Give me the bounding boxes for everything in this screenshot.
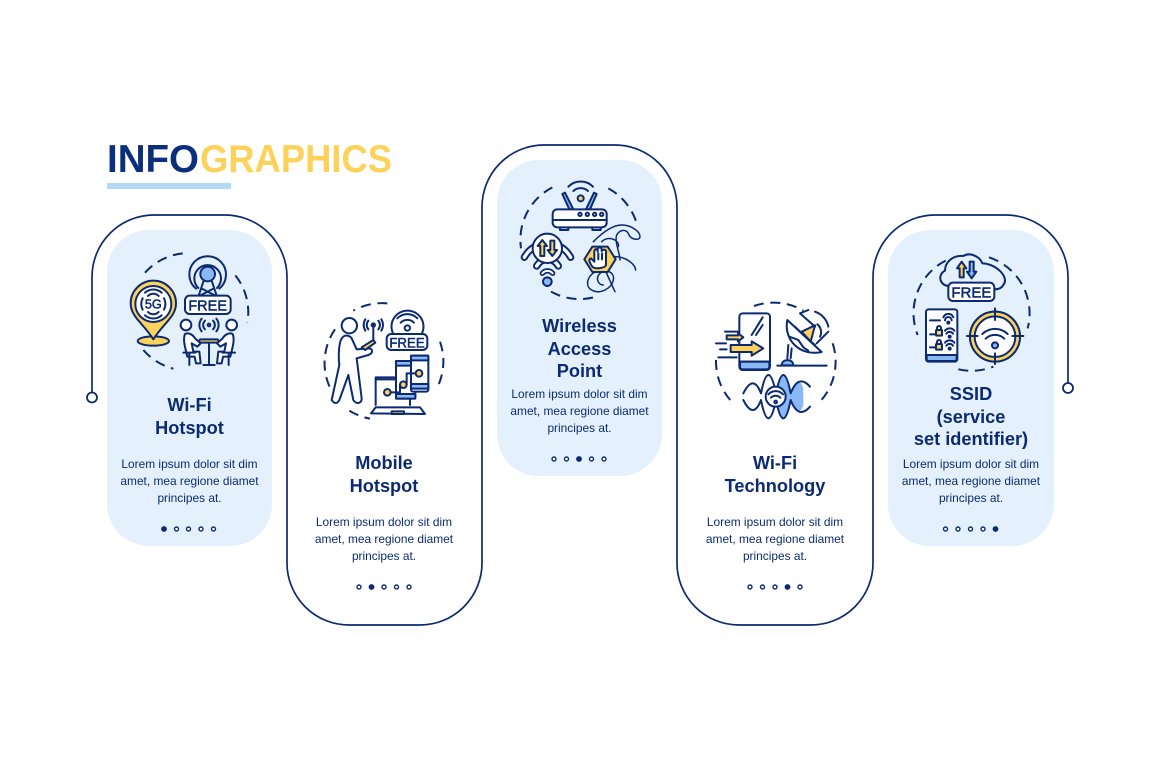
heading: Wi-Fi Technology: Wi-Fi — [753, 453, 797, 473]
icon: Mobile hotspot — [325, 303, 443, 419]
title: INFO — [107, 138, 199, 181]
heading: SSID (service set identifier): set identifier) — [914, 429, 1028, 449]
step dots 2 — [357, 585, 411, 589]
heading: Wireless Access Point: Wireless — [542, 316, 617, 336]
heading: Mobile Hotspot: Mobile — [355, 453, 413, 473]
icon: Wi-Fi hotspot: 5G — [145, 298, 162, 312]
title: GRAPHICS — [200, 138, 392, 181]
title — [107, 138, 392, 189]
step dots 1 — [162, 527, 216, 531]
text: Mobile Hotspot description: amet, mea regione diamet — [315, 532, 454, 546]
text: Mobile Hotspot description: Lorem ipsum dolor sit dim — [316, 515, 452, 529]
step dots 3 — [552, 457, 606, 461]
text: Wi-Fi Technology description: principes at. — [743, 549, 807, 563]
text: Wi-Fi Technology description: amet, mea regione diamet — [706, 532, 845, 546]
step dots 5 — [944, 527, 998, 531]
step dots 4 — [748, 585, 802, 589]
icon: SSID — [913, 254, 1030, 371]
heading: Wi-Fi Hotspot: Hotspot — [155, 418, 224, 438]
text: Wi-Fi Technology description: Lorem ipsum dolor sit dim — [707, 515, 843, 529]
icon: Wireless access point — [520, 182, 640, 299]
panel background: Wi-Fi Hotspot — [107, 230, 272, 546]
icon: SSID: FREE — [951, 285, 992, 301]
text: Wireless Access Point description: principes at. — [547, 421, 612, 435]
heading: Wi-Fi Hotspot: Wi-Fi — [167, 395, 212, 415]
text: Wireless Access Point description: amet, mea regione diamet — [510, 404, 649, 418]
icon: Wi-Fi hotspot — [131, 253, 248, 369]
heading: SSID (service set identifier): (service — [937, 407, 1005, 427]
panel background: Wireless Access Point — [497, 160, 662, 476]
text: Mobile Hotspot description: principes at. — [352, 549, 416, 563]
text: Wi-Fi Hotspot description: principes at. — [157, 491, 222, 505]
text: Wireless Access Point description: Lorem ipsum dolor sit dim — [511, 387, 648, 401]
icon: Mobile hotspot: FREE — [389, 335, 425, 350]
heading: Wireless Access Point: Point — [557, 361, 602, 381]
heading: SSID (service set identifier): SSID — [950, 384, 992, 404]
text: SSID description: principes at. — [939, 491, 1003, 505]
text: Wi-Fi Hotspot description: Lorem ipsum dolor sit dim — [121, 457, 258, 471]
text: SSID description: Lorem ipsum dolor sit dim — [903, 457, 1039, 471]
continuous outline connecting panels — [87, 145, 1073, 625]
text: SSID description: amet, mea regione diamet — [902, 474, 1041, 488]
text: Wi-Fi Hotspot description: amet, mea regione diamet — [120, 474, 259, 488]
heading: Wireless Access Point: Access — [548, 339, 611, 359]
panel background: SSID — [888, 230, 1054, 546]
icon: Wi-Fi hotspot: FREE — [188, 298, 227, 314]
heading: Mobile Hotspot: Hotspot — [350, 476, 418, 496]
icon: Wi-Fi technology — [716, 303, 836, 418]
heading: Wi-Fi Technology: Technology — [725, 476, 826, 496]
